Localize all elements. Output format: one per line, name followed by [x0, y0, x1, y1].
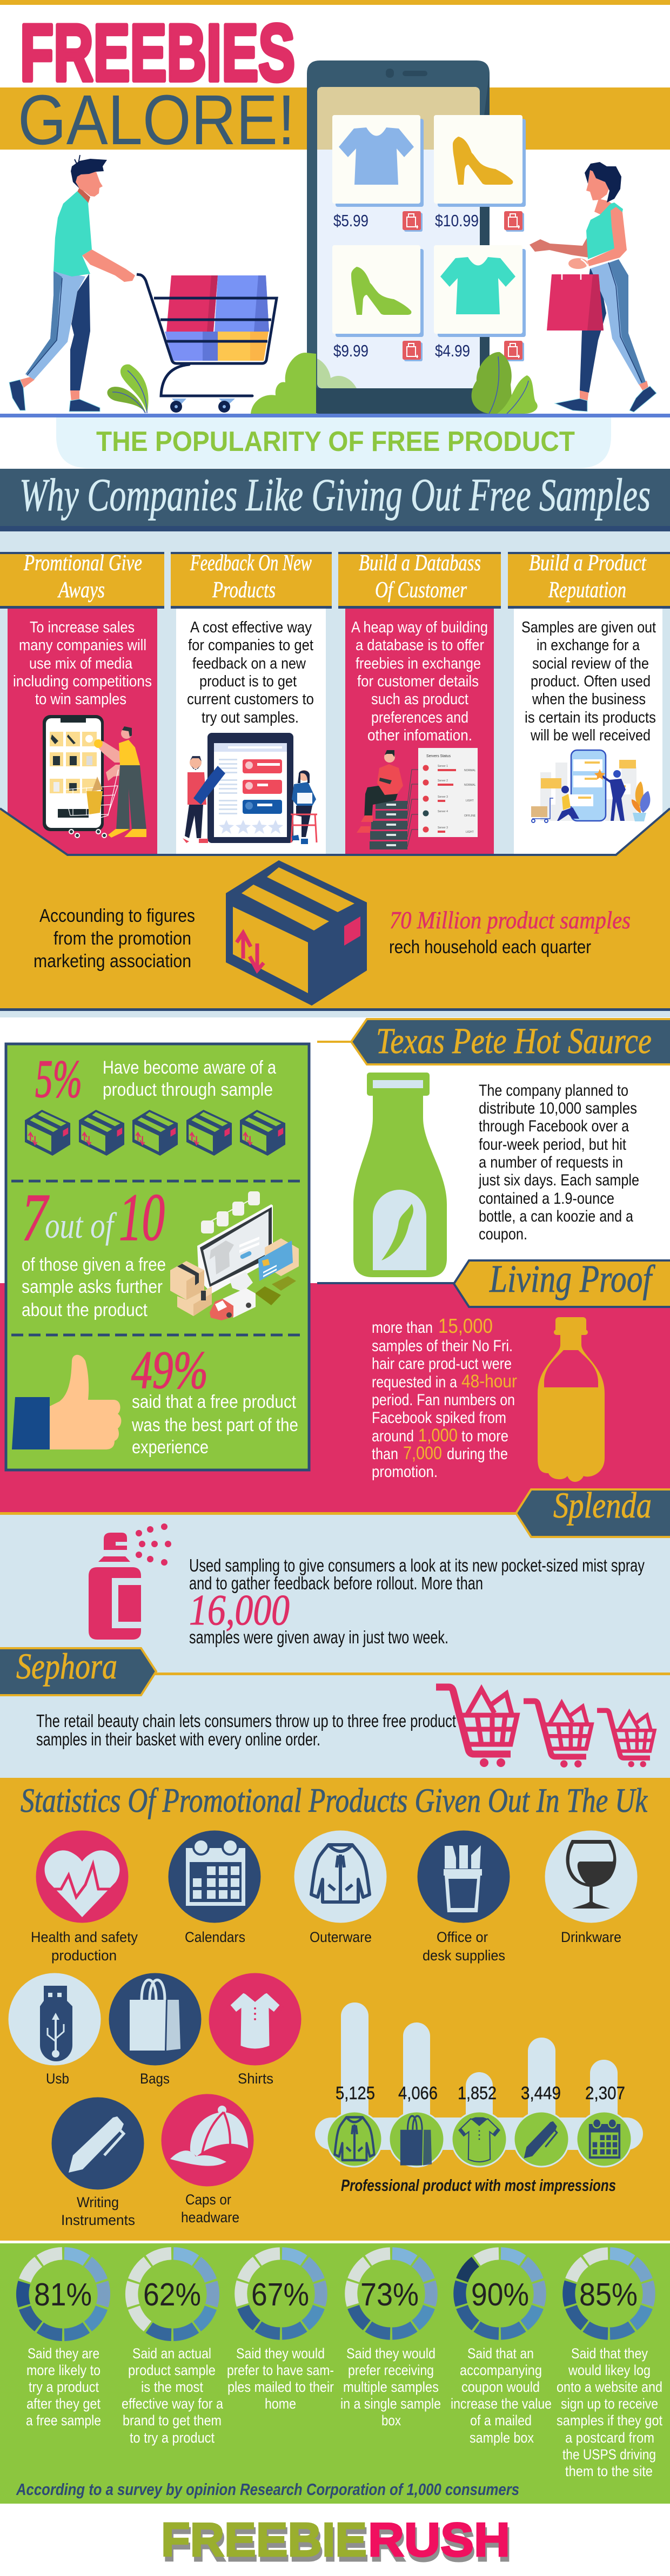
- text block: period. Fan numbers on: [372, 1391, 515, 1409]
- stat: 81%: Said they are: [28, 2345, 99, 2362]
- item: drinkware: Drinkware: [561, 1929, 621, 1945]
- stat: 49%: 49%: [131, 1340, 208, 1400]
- icon: centre bush: [251, 353, 357, 414]
- item: health and safety: Health and safety: [31, 1929, 138, 1945]
- donut: 90%: [447, 2241, 552, 2346]
- stat: 85%: a postcard from: [565, 2430, 654, 2446]
- body text: such as product: [371, 691, 468, 708]
- icon: product bottle: [538, 1317, 605, 1482]
- item: shirts: [209, 1973, 302, 2087]
- body text: current customers to: [187, 691, 314, 708]
- banner: splenda: [516, 1485, 670, 1537]
- text block: [478, 1082, 639, 1243]
- item: usb: [9, 1973, 100, 2087]
- text block: bottle, a can koozie and a: [479, 1208, 633, 1225]
- stat: 81%: [10, 2241, 116, 2429]
- stat: 85%: [557, 2241, 662, 2479]
- illustration: server status panel: OFFLINE: [464, 814, 476, 818]
- product card: blue shirt: [332, 115, 424, 232]
- item: writing instruments: Instruments: [61, 2212, 135, 2228]
- body text: try out samples.: [202, 709, 299, 726]
- stat: 85%: would likey log: [568, 2362, 651, 2378]
- text block: samples in their basket with every online order.: [36, 1729, 320, 1749]
- panel: living proof: [317, 1257, 670, 1482]
- item: writing instruments: [52, 2098, 144, 2228]
- header: [0, 551, 164, 609]
- text: source: marketing association: [34, 951, 191, 972]
- body text: when the business: [532, 691, 646, 708]
- man: neck: [77, 187, 90, 204]
- stat caption: rech household each quarter: [389, 937, 591, 957]
- header: Build a Databass: [359, 551, 481, 576]
- body text: for companies to get: [188, 637, 313, 654]
- item: calendars: [169, 1831, 260, 1945]
- stat: 62%: 62%: [143, 2277, 201, 2312]
- stat: 49%: [131, 1340, 298, 1458]
- illustration: online order and delivery: [170, 1191, 299, 1320]
- phone screen: [317, 87, 480, 388]
- bar: pen 3,449: 3,449: [521, 2083, 561, 2103]
- divider dashes: [11, 1181, 304, 1335]
- text block: more than: [372, 1319, 433, 1337]
- item: calendars: Calendars: [185, 1929, 245, 1945]
- body text: [521, 619, 656, 744]
- text block: distribute 10,000 samples: [479, 1100, 637, 1117]
- stat: 81%: 81%: [34, 2277, 92, 2312]
- text block: coupon.: [479, 1225, 527, 1243]
- illustration: server status panel: Server 3: [438, 795, 448, 799]
- stat: 7 out of 10: out of: [45, 1205, 117, 1246]
- body text: product. Often used: [531, 673, 651, 690]
- logo: freebierush: [161, 2513, 510, 2566]
- bar: calendar 2,307: 2,307: [585, 2083, 625, 2103]
- stat: 62%: product sample: [128, 2362, 216, 2378]
- stat: 81%: a free sample: [26, 2412, 101, 2429]
- product card: blue shirt: $5.99: [333, 211, 368, 230]
- pink section background: [0, 1283, 670, 1512]
- stat: 90%: of a mailed: [470, 2412, 532, 2429]
- stat: 5%: 5%: [35, 1049, 82, 1109]
- stat: 90%: increase the value: [451, 2396, 552, 2412]
- man: head: [76, 172, 103, 197]
- header: Aways: [57, 578, 105, 603]
- text block: contained a 1.9-ounce: [479, 1190, 614, 1208]
- body text: [351, 619, 488, 744]
- illustration: server status panel: LIGHT: [466, 799, 474, 803]
- text block: 48-hour: [461, 1371, 517, 1392]
- banner: sephora: Sephora: [16, 1646, 117, 1687]
- body text: A heap way of building: [351, 619, 488, 636]
- stat: 73%: Said they would: [346, 2345, 435, 2362]
- illustration: shopping cart: [137, 274, 277, 413]
- card body: [176, 609, 326, 854]
- title line: Galore: GALORE!: [18, 80, 295, 159]
- body text: is certain its products: [525, 709, 656, 726]
- bar: pen 3,449: [514, 2083, 569, 2167]
- woman: neck: [594, 199, 613, 215]
- body text: preferences and: [371, 709, 468, 726]
- stat: 62%: Said an actual: [132, 2345, 211, 2362]
- text block: 1,000: [418, 1425, 458, 1446]
- stat: 67%: 67%: [251, 2277, 309, 2312]
- stat: 7 out of 10: of those given a free: [22, 1255, 166, 1275]
- stat: 62%: [119, 2241, 225, 2446]
- illustration: server status panel: Server 4: [438, 810, 448, 813]
- stat: 49%: experience: [132, 1437, 209, 1458]
- text block: 15,000: [438, 1315, 493, 1338]
- bar: bag 4,066: [389, 2083, 444, 2167]
- illustration: people rating on tablet: [183, 733, 317, 844]
- donut: 85%: [557, 2241, 661, 2346]
- item: outerware: [294, 1831, 387, 1945]
- ground line: [0, 414, 670, 417]
- icon: cardboard box: [226, 860, 367, 1006]
- product card: teal shirt: [434, 245, 526, 361]
- stat: 7 out of 10: [22, 1181, 166, 1320]
- item: office supplies: Office or: [437, 1929, 488, 1945]
- illustration: server status panel: [357, 748, 478, 849]
- survey source note: According to a survey by opinion Research Corporation of 1,000 consumers: [16, 2480, 519, 2499]
- text block: The retail beauty chain lets consumers throw up to three free product: [36, 1711, 456, 1731]
- illustration: server status panel: Server 2: [438, 779, 448, 783]
- stat: 7 out of 10: 7: [22, 1181, 49, 1255]
- chart: professional products with most impressions: [315, 2002, 643, 2195]
- logo: freebierush: FREEBIE: [161, 2513, 367, 2566]
- bar: shirt 1,852: [452, 2083, 507, 2167]
- panel: gold stat section: [0, 808, 670, 1011]
- stat: 85%: them to the site: [565, 2463, 653, 2479]
- stat: 5%: product through sample: [103, 1080, 273, 1100]
- text block: [189, 1555, 645, 1647]
- card body: [8, 609, 157, 854]
- header: Of Customer: [375, 578, 467, 603]
- stat: 70 million: 70 Million product samples: [390, 906, 631, 934]
- stat: 90%: coupon would: [461, 2379, 540, 2395]
- stat: 73%: in a single sample: [340, 2396, 441, 2412]
- stat: 5%: Have become aware of a: [103, 1057, 276, 1078]
- icon: right plant: [472, 352, 538, 414]
- stat: 85%: 85%: [579, 2277, 638, 2312]
- text block: 16,000: [189, 1587, 290, 1634]
- icons: three shopping carts: [436, 1687, 655, 1768]
- stat: 90%: accompanying: [460, 2362, 542, 2378]
- item: health and safety: production: [51, 1947, 117, 1964]
- stat: 7 out of 10: 10: [119, 1181, 165, 1255]
- stat: 67%: prefer to have sam-: [227, 2362, 334, 2378]
- banner: splenda: Splenda: [553, 1485, 652, 1526]
- bar: calendar 2,307: [577, 2083, 632, 2167]
- stat: 7 out of 10: sample asks further: [22, 1277, 163, 1297]
- bar: jacket 5,125: 5,125: [336, 2083, 375, 2103]
- product card: gold heel: $10.99: [435, 211, 479, 230]
- header: [171, 551, 332, 609]
- text block: Facebook spiked from: [372, 1409, 506, 1427]
- body text: including competitions: [13, 673, 152, 690]
- text block: The company planned to: [479, 1082, 628, 1100]
- text block: requested in a: [372, 1373, 457, 1391]
- woman: top: [586, 203, 623, 259]
- icon: left plant: [107, 365, 149, 413]
- body text: To increase sales: [30, 619, 135, 636]
- text block: samples of their No Fri.: [372, 1337, 513, 1355]
- text block: just six days. Each sample: [478, 1171, 639, 1189]
- panel: statistics of promotional products: [0, 1778, 670, 2241]
- product card: teal shirt: $4.99: [435, 341, 470, 360]
- body text: use mix of media: [29, 655, 133, 672]
- stat: 5%: [35, 1049, 276, 1109]
- text block: [372, 1315, 517, 1481]
- stat: 49%: said that a free product: [132, 1392, 296, 1412]
- panel: sephora: [0, 1646, 670, 1768]
- man: ankles: [20, 377, 79, 402]
- body text: to win samples: [35, 691, 126, 708]
- item: drinkware: [545, 1831, 638, 1945]
- woman: front arm: [530, 236, 589, 258]
- donut: 81%: [10, 2241, 116, 2348]
- light background lower: [0, 1515, 670, 1778]
- stat: 62%: effective way for a: [122, 2396, 224, 2412]
- body text: will be well received: [530, 727, 651, 744]
- text block: around: [372, 1427, 414, 1445]
- man: torso: [53, 191, 92, 277]
- stat: 67%: Said they would: [236, 2345, 325, 2362]
- woman: ankles: [580, 381, 648, 402]
- phone body: [307, 60, 490, 414]
- item: office supplies: [417, 1831, 510, 1964]
- icon: spray bottle: [89, 1523, 171, 1640]
- header: Feedback On New: [190, 551, 312, 576]
- product card: green heel: [332, 245, 424, 361]
- man: dark leg: [70, 274, 90, 390]
- subtitle pill: [56, 417, 611, 468]
- item: office supplies: desk supplies: [423, 1947, 505, 1964]
- illustration: server status panel: Server 1: [438, 765, 448, 768]
- banner: living proof: [317, 1257, 670, 1307]
- text block: 7,000: [403, 1443, 442, 1464]
- illustration: shopper at phone: [43, 715, 146, 838]
- text block: four-week period, but hit: [479, 1136, 627, 1154]
- text block: and to gather feedback before rollout. More than: [189, 1573, 483, 1593]
- illustration: man with shopping cart: [9, 155, 135, 412]
- woman: arm: [587, 207, 627, 266]
- stat: 73%: prefer receiving: [348, 2362, 434, 2378]
- illustration: server status panel: NORMAL: [464, 769, 476, 772]
- stat: 67%: [227, 2241, 334, 2412]
- text: source: Accounding to figures: [39, 906, 195, 926]
- woman: shopping bag: [547, 274, 604, 331]
- bar: jacket 5,125: [327, 2083, 382, 2167]
- stat: 62%: brand to get them: [123, 2412, 222, 2429]
- header: [508, 551, 670, 609]
- item: caps: Caps or: [185, 2191, 231, 2208]
- stat: 90%: 90%: [471, 2277, 529, 2312]
- panel: build a product reputation: [508, 551, 670, 854]
- illustration: server status panel: NORMAL: [464, 784, 476, 787]
- item: writing instruments: Writing: [77, 2194, 119, 2210]
- text block: samples were given away in just two week.: [189, 1627, 448, 1647]
- stat: 90%: Said that an: [467, 2345, 534, 2362]
- header: Reputation: [548, 578, 626, 603]
- section band: why companies: [0, 469, 670, 531]
- stat: 73%: 73%: [360, 2277, 419, 2312]
- body text: [13, 619, 152, 708]
- panel: green stats: [6, 1044, 309, 1470]
- stat: 62%: is the most: [141, 2379, 203, 2395]
- card body: [345, 609, 494, 854]
- stat: 67%: home: [265, 2396, 296, 2412]
- item: bags: Bags: [140, 2071, 170, 2087]
- item: bags: [109, 1973, 201, 2087]
- item: outerware: Outerware: [310, 1929, 372, 1945]
- body text: [187, 619, 314, 726]
- donut: 67%: [229, 2241, 333, 2346]
- bar: bag 4,066: 4,066: [398, 2083, 438, 2103]
- stat: 67%: ples mailed to their: [227, 2379, 334, 2395]
- woman: jeans: [591, 259, 646, 385]
- woman: dark leg: [580, 268, 606, 393]
- man: arm: [82, 249, 135, 282]
- stat: 73%: multiple samples: [343, 2379, 439, 2395]
- icon row: five boxes: [25, 1110, 285, 1156]
- woman: head: [586, 170, 609, 200]
- item: usb: Usb: [46, 2071, 69, 2087]
- body text: a database is to offer: [356, 637, 484, 654]
- text block: [36, 1711, 456, 1749]
- bar: shirt 1,852: 1,852: [458, 2083, 497, 2103]
- man: shoes: [9, 380, 25, 410]
- title band: [0, 87, 670, 150]
- illustration: woman with shopping bag: [530, 162, 656, 412]
- header: Build a Product: [529, 551, 647, 576]
- subtitle: THE POPULARITY OF FREE PRODUCT: [96, 426, 575, 457]
- product card: green heel: $9.99: [333, 341, 368, 360]
- body text: A cost effective way: [190, 619, 312, 636]
- panel: promotional give aways: [0, 551, 164, 854]
- body text: social review of the: [532, 655, 649, 672]
- top gold strip: [0, 0, 670, 5]
- panel: splenda: [89, 1485, 670, 1647]
- text: source: from the promotion: [53, 928, 191, 949]
- stat: 90%: [447, 2241, 552, 2446]
- panel: survey results: [0, 2241, 670, 2504]
- body text: feedback on a new: [192, 655, 306, 672]
- title line: Freebies: FREEBIES: [20, 8, 295, 98]
- text block: during the: [447, 1445, 508, 1463]
- header: Promtional Give: [23, 551, 142, 576]
- man: light leg: [25, 271, 85, 380]
- header: [338, 551, 501, 609]
- stat: 81%: more likely to: [26, 2362, 100, 2378]
- stat: 90%: sample box: [470, 2430, 534, 2446]
- icon: thumbs up: [12, 1355, 121, 1449]
- item: caps: [161, 2094, 254, 2226]
- text block: than: [372, 1445, 398, 1463]
- title: [18, 8, 295, 159]
- body text: in exchange for a: [537, 637, 640, 654]
- text block: hair care prod-uct were: [372, 1355, 512, 1373]
- stat: 62%: to try a product: [130, 2430, 215, 2446]
- header: Products: [212, 578, 276, 603]
- donut: 73%: [339, 2241, 444, 2346]
- item: shirts: Shirts: [238, 2071, 273, 2087]
- stat: 7 out of 10: about the product: [22, 1300, 148, 1320]
- panel: feedback on new products: [171, 551, 332, 854]
- stat: 85%: Said that they: [571, 2345, 648, 2362]
- woman: hand holding handle: [568, 258, 588, 269]
- logo: freebierush: RUSH: [368, 2513, 510, 2566]
- product card: gold heel: [434, 115, 526, 232]
- text block: through Facebook over a: [479, 1117, 629, 1135]
- body text: for customer details: [357, 673, 479, 690]
- text block: promotion.: [372, 1463, 438, 1481]
- body text: freebies in exchange: [356, 655, 481, 672]
- banner: sephora: [0, 1646, 670, 1695]
- illustration: server status panel: Servers Status: [426, 753, 451, 758]
- stat: 81%: try a product: [29, 2379, 99, 2395]
- stat: 73%: box: [381, 2412, 401, 2429]
- woman: shoes: [555, 399, 587, 412]
- panel: build a database: [338, 551, 501, 854]
- illustration: server status panel: LIGHT: [466, 831, 474, 834]
- illustration: reviews on phone: [531, 750, 650, 822]
- illustration: phone with product cards: [307, 60, 526, 414]
- body text: other infomation.: [367, 727, 472, 744]
- panel: texas pete: [317, 1019, 670, 1277]
- text block: to more: [461, 1427, 508, 1445]
- text: source: [34, 906, 195, 972]
- body text: many companies will: [19, 637, 146, 654]
- icon: hot sauce bottle: [353, 1073, 447, 1277]
- donut: 62%: [119, 2241, 225, 2348]
- light background: [0, 531, 670, 1017]
- body text: product is to get: [199, 673, 297, 690]
- stat: 49%: was the best part of the: [131, 1415, 298, 1435]
- stat: 81%: after they get: [26, 2396, 100, 2412]
- text block: a number of requests in: [479, 1154, 623, 1171]
- item: health and safety: [31, 1831, 138, 1964]
- illustration: server status panel: Server 3: [438, 826, 448, 830]
- stat: 73%: [339, 2241, 444, 2429]
- item: caps: headware: [181, 2209, 239, 2226]
- card body: [514, 609, 662, 854]
